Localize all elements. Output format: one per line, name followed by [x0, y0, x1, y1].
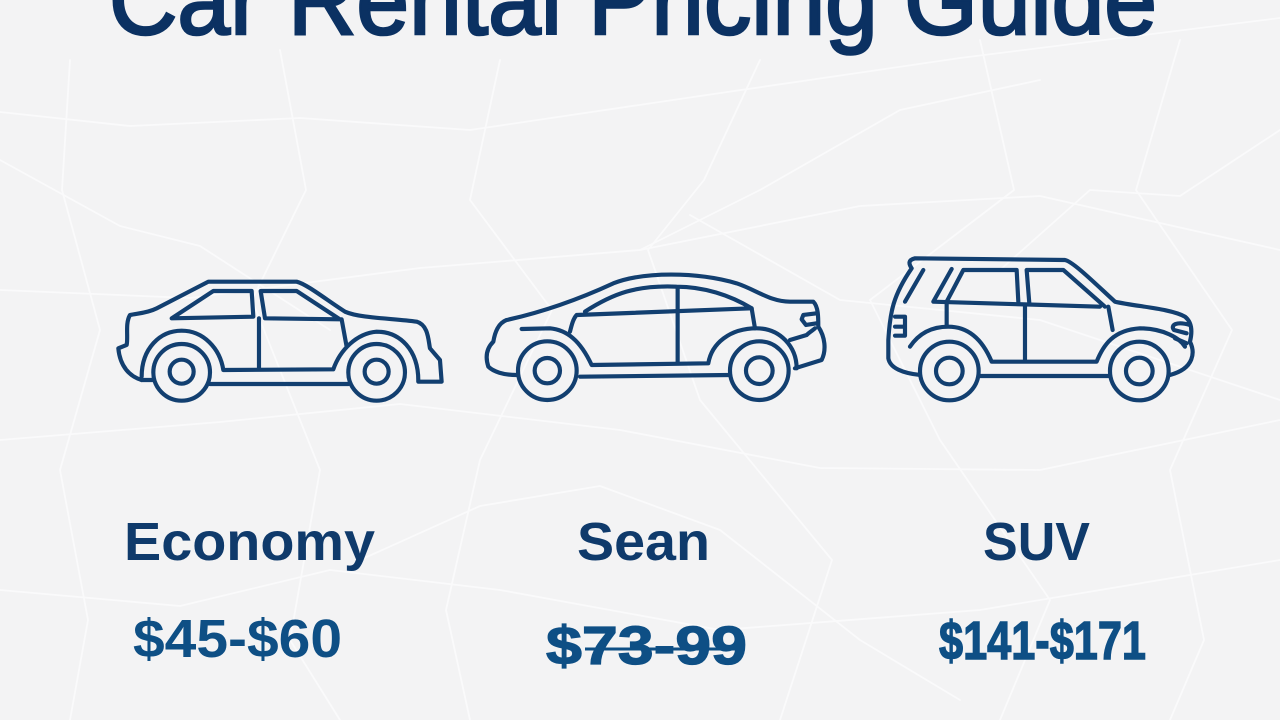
price: SUV: $141-$171	[939, 611, 1146, 671]
icon: SUV car	[888, 258, 1193, 400]
label: SUV: SUV	[983, 512, 1090, 572]
icon: economy car	[118, 282, 442, 401]
icon: sedan car	[487, 275, 825, 400]
price: economy: $45-$60	[133, 609, 342, 669]
price: sedan: $73-99	[546, 616, 747, 676]
label: Economy: Economy	[124, 512, 375, 572]
label: Sedan tier: Sean	[577, 512, 710, 572]
